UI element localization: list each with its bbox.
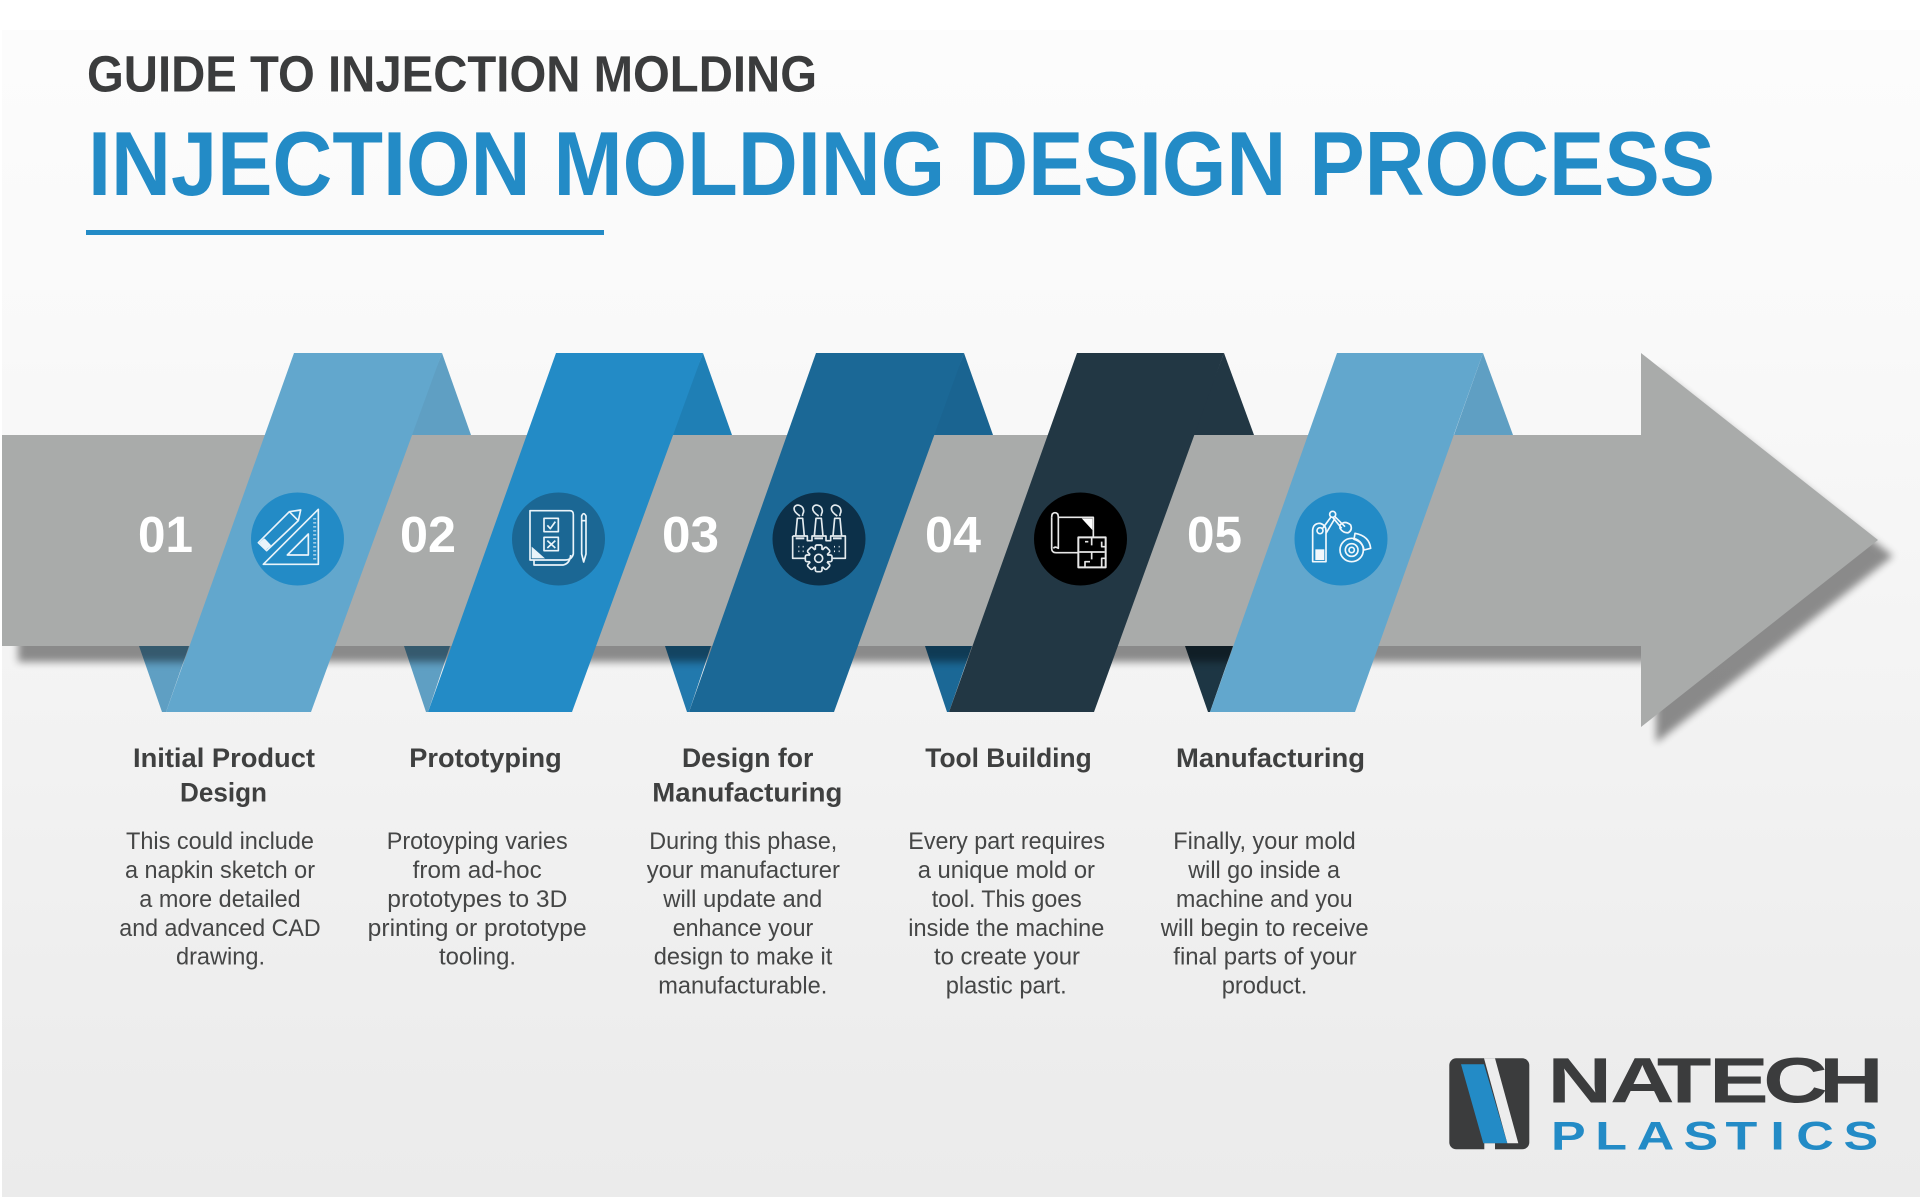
- step 3 description: will update and: [662, 886, 822, 913]
- step 1 description: a more detailed: [139, 886, 301, 913]
- step 3 description: your manufacturer: [647, 857, 840, 884]
- step 4 text: [908, 743, 1105, 999]
- step 3 heading: Design for: [682, 743, 814, 773]
- step 5 description: will go inside a: [1187, 857, 1341, 884]
- title underline: [86, 230, 604, 235]
- step number 01: 01: [138, 506, 193, 563]
- ribbon tails behind the arrow: [139, 353, 1513, 712]
- step 2 description: Protoyping varies: [387, 828, 568, 855]
- step 3 heading: Manufacturing: [652, 778, 842, 808]
- step 2 description: printing or prototype: [368, 915, 587, 942]
- step number 02: 02: [400, 506, 456, 563]
- step 4 ribbon: [949, 353, 1224, 712]
- subtitle: GUIDE TO INJECTION MOLDING: [87, 46, 817, 103]
- step 3 description: design to make it: [654, 944, 833, 970]
- step 4 description: to create your: [934, 944, 1080, 970]
- step 5 description: will begin to receive: [1160, 915, 1369, 942]
- step 2 description: tooling.: [439, 944, 516, 970]
- step 4 description: Every part requires: [908, 828, 1105, 855]
- step 2 description: prototypes to 3D: [387, 886, 567, 913]
- step 1 description: drawing.: [176, 944, 265, 970]
- step 4 description: tool. This goes: [932, 886, 1082, 913]
- step 1 description: This could include: [126, 828, 314, 855]
- step 5 text: [1160, 743, 1369, 999]
- icon: pencil and set square: [251, 492, 344, 586]
- step 3 ribbon: [689, 353, 964, 712]
- step 1 heading: Design: [180, 778, 267, 808]
- step number 03: 03: [662, 506, 719, 563]
- step 2 description: [368, 828, 587, 970]
- step 1 description: and advanced CAD: [119, 915, 321, 942]
- step 5 description: machine and you: [1176, 886, 1353, 913]
- step 5 description: [1160, 828, 1369, 999]
- step 1 text: [119, 743, 321, 970]
- step 5 heading: Manufacturing: [1176, 743, 1365, 773]
- step 4 description: [908, 828, 1105, 999]
- step 5 description: product.: [1222, 972, 1307, 999]
- icon: blueprint and floor plan: [1034, 492, 1127, 586]
- step 4 description: inside the machine: [908, 915, 1104, 942]
- step 5 ribbon: [1210, 353, 1483, 712]
- step 2 description: from ad-hoc: [413, 857, 542, 884]
- arrow shadow: [18, 369, 1893, 743]
- step 1 heading: [133, 743, 315, 808]
- step 1 description: a napkin sketch or: [125, 857, 315, 884]
- logo mark: [1449, 1058, 1529, 1150]
- header: [86, 46, 1715, 235]
- icon: robot arm and disc: [1294, 492, 1388, 586]
- step 2 text: [368, 743, 587, 970]
- icon: checklist and pen: [512, 492, 605, 586]
- step 1 heading: Initial Product: [133, 743, 315, 773]
- step 2 ribbon: [428, 353, 703, 712]
- icon: factory and gear: [772, 492, 866, 586]
- step 3 heading: [652, 743, 842, 808]
- step 1 description: [119, 828, 321, 970]
- step 3 description: enhance your: [673, 915, 813, 942]
- grey process arrow: [2, 353, 1878, 727]
- logo: Natech Plastics: [1449, 1046, 1884, 1158]
- step 1 ribbon: [166, 353, 442, 712]
- step 4 description: plastic part.: [946, 972, 1067, 999]
- logo wordmark PLASTICS: PLASTICS: [1551, 1113, 1878, 1158]
- step 3 text: [647, 743, 842, 999]
- step 4 description: a unique mold or: [918, 857, 1095, 884]
- step 5 description: final parts of your: [1173, 944, 1357, 970]
- step 3 description: [647, 828, 840, 999]
- step 3 description: manufacturable.: [658, 972, 827, 999]
- logo wordmark NATECH: NATECH: [1547, 1046, 1884, 1116]
- step 4 heading: Tool Building: [925, 743, 1092, 773]
- step 5 description: Finally, your mold: [1173, 828, 1356, 855]
- step 2 heading: Prototyping: [409, 743, 562, 773]
- step number 05: 05: [1187, 506, 1242, 563]
- step number 04: 04: [925, 506, 982, 563]
- main title: INJECTION MOLDING DESIGN PROCESS: [88, 114, 1715, 215]
- step 3 description: During this phase,: [649, 828, 837, 855]
